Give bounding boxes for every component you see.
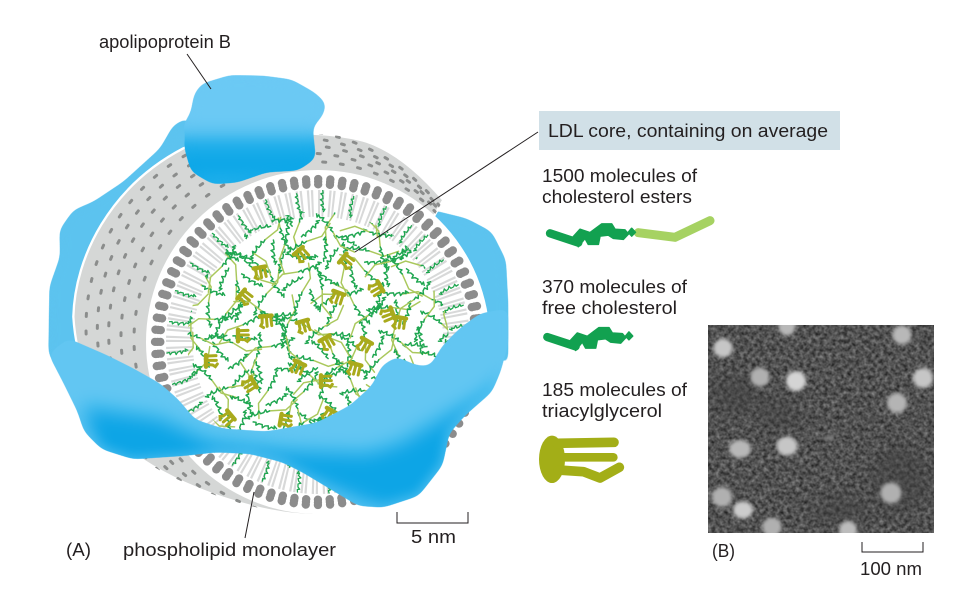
scale bar: 5 nm: 5 nm (411, 527, 456, 547)
phospholipid tails (179, 203, 457, 481)
grey lipid monolayer shell with head dots (72, 134, 442, 514)
heading: LDL core: LDL core, containing on average (548, 121, 828, 141)
icon: triacylglycerol (539, 436, 619, 483)
phospholipid heads (155, 179, 481, 505)
diagram: LDL particle (48, 75, 517, 524)
label: triacylglycerol: triacylglycerol (542, 401, 662, 421)
label: panel A: (A) (66, 540, 91, 560)
label: triacylglycerol: 185 molecules of (542, 380, 688, 400)
label: free cholesterol (542, 277, 688, 318)
label: free cholesterol: free cholesterol (542, 298, 677, 318)
scale bar: 100 nm: 100 nm (860, 559, 922, 579)
icon: free cholesterol (547, 328, 633, 350)
label: phospholipid monolayer: phospholipid monolayer (123, 540, 336, 560)
scale bar: 100 nm (860, 542, 923, 579)
leader line: phospholipid monolayer (245, 492, 254, 538)
label: apolipoprotein B: apolipoprotein B (99, 32, 231, 52)
label: triacylglycerol (542, 380, 688, 421)
triacylglycerol molecules in core (206, 247, 406, 427)
icon: cholesterol ester (550, 221, 710, 247)
scale bar: 5 nm (397, 512, 468, 547)
label: cholesterol esters: cholesterol esters (542, 187, 692, 207)
blue protein ribbon, back part (48, 117, 508, 420)
leader line: apolipoprotein B (187, 54, 211, 89)
label: cholesterol esters (542, 166, 698, 207)
label: cholesterol esters: 1500 molecules of (542, 166, 698, 186)
micrograph: LDL particles (708, 318, 934, 539)
cut face: white disc (146, 170, 490, 514)
heading: LDL core (539, 111, 840, 150)
label: free cholesterol: 370 molecules of (542, 277, 688, 297)
label: panel B: (B) (712, 541, 735, 561)
LDL core: cholesterol esters and cholesterol (117, 166, 494, 514)
cholesterol among phospholipid tails (166, 190, 471, 494)
leader line: LDL core (355, 132, 538, 252)
blue protein ribbon, front band (48, 308, 517, 510)
apolipoprotein B block (182, 75, 326, 184)
